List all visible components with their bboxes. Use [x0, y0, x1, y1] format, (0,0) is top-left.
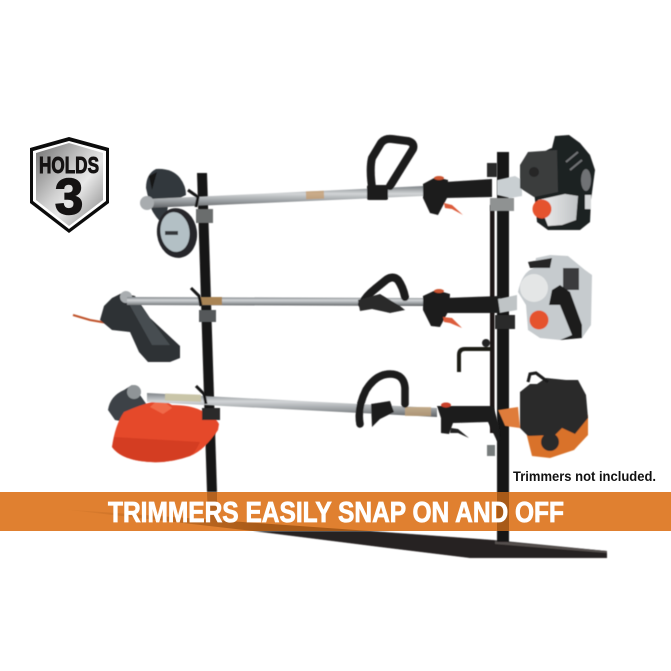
rack frame	[197, 152, 607, 558]
engine	[523, 415, 588, 458]
left post	[197, 173, 217, 492]
rack base rail	[253, 531, 607, 558]
neck	[497, 176, 522, 198]
loop handle	[359, 374, 405, 424]
trimmer 2 (middle)	[73, 255, 592, 362]
D handle	[371, 139, 413, 194]
rack clamp	[196, 209, 213, 223]
icon: holds 3 shield badge: 3	[55, 168, 83, 225]
icon: holds 3 shield badge: HOLDS	[39, 152, 99, 178]
neck	[498, 295, 517, 313]
grip and tube	[423, 290, 450, 327]
engine	[530, 135, 595, 230]
icon: holds 3 shield badge	[30, 137, 109, 233]
trimmer 3 (bottom)	[108, 373, 588, 462]
grip and tube	[423, 177, 448, 215]
shaft	[147, 393, 437, 417]
guard	[100, 293, 180, 362]
loop handle	[362, 278, 405, 304]
trimmer 1 (top)	[140, 135, 595, 261]
orange guard	[112, 398, 219, 462]
right post	[497, 152, 509, 542]
shaft	[148, 186, 423, 208]
posts seen through banner	[207, 492, 217, 521]
gearbox	[108, 385, 147, 422]
disclaimer note: Trimmers not included.	[513, 468, 656, 484]
hook handle	[459, 349, 491, 372]
cutting line	[73, 315, 113, 324]
rack clamp	[202, 408, 220, 420]
thin rear post	[490, 205, 494, 433]
guard and wheel head	[146, 169, 186, 205]
banner headline: TRIMMERS EASILY SNAP ON AND OFF	[108, 497, 564, 529]
base rail seen through banner	[60, 509, 370, 531]
orange banner	[0, 492, 671, 531]
engine	[518, 255, 592, 340]
grip and tube	[437, 406, 500, 441]
rack clamp	[199, 310, 216, 322]
neck	[498, 407, 520, 428]
shaft	[127, 297, 423, 306]
